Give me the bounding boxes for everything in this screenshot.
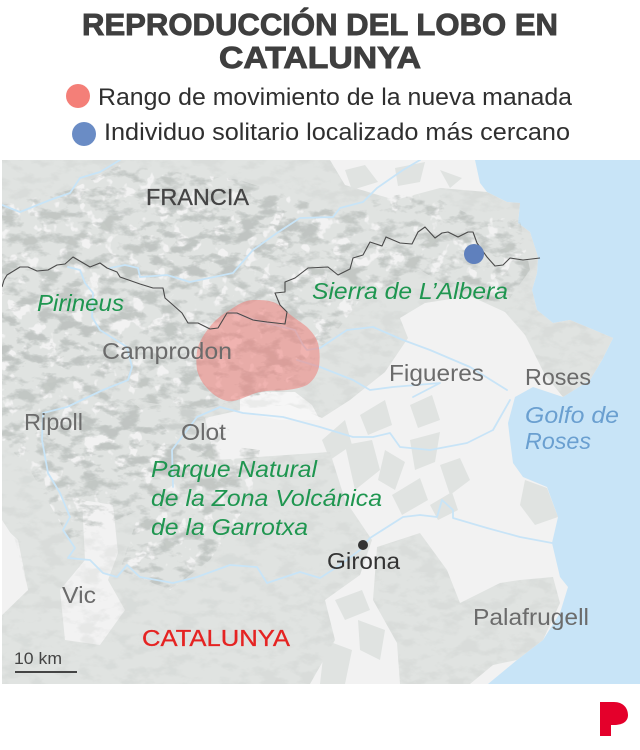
legend bbox=[66, 84, 573, 146]
label: Golfo de Roses bbox=[526, 406, 618, 449]
massif: Palafrugell bbox=[373, 533, 560, 684]
massif: Montgrí bbox=[520, 480, 558, 525]
label: Parque Natural: de la Garrotxa bbox=[151, 514, 308, 540]
logo bbox=[600, 702, 628, 736]
forest fragments bbox=[320, 162, 470, 684]
plain: western edge bbox=[11, 534, 28, 587]
label: Pirineus: Pirineus bbox=[37, 290, 125, 316]
legend item: lone individual: Individuo solitario localizado más cercano bbox=[104, 119, 570, 146]
faint relief everywhere bbox=[16, 392, 318, 644]
terrain bbox=[2, 160, 640, 684]
title bbox=[82, 6, 558, 75]
relief shading bbox=[2, 166, 530, 588]
legend item: new pack range: Rango de movimiento de la nueva manada bbox=[98, 84, 573, 111]
title: REPRODUCCIÓN DEL LOBO EN bbox=[82, 6, 558, 42]
title: CATALUNYA bbox=[219, 40, 421, 75]
plain: Vic bbox=[60, 500, 125, 645]
label: Parque Natural bbox=[152, 460, 382, 535]
scale bar: 10 km bbox=[14, 649, 62, 668]
label: Girona bbox=[328, 540, 400, 569]
light fragments bbox=[2, 165, 526, 590]
label: Figueres: Figueres bbox=[389, 360, 484, 386]
label: Golfo de Roses: Golfo de bbox=[525, 402, 619, 428]
label: Parque Natural: de la Zona Volcánica bbox=[151, 485, 382, 511]
label: Parque Natural: Parque Natural bbox=[151, 456, 318, 482]
rivers bbox=[2, 160, 552, 583]
label: Camprodon: Camprodon bbox=[102, 338, 232, 364]
scale bar bbox=[15, 652, 77, 673]
lone individual marker bbox=[464, 244, 484, 264]
land bbox=[2, 160, 613, 684]
label: Ripoll: Ripoll bbox=[24, 409, 83, 435]
label: Catalunya: CATALUNYA bbox=[142, 625, 291, 651]
plain: Olot bbox=[240, 392, 318, 416]
label: Francia: FRANCIA bbox=[146, 184, 250, 210]
border bbox=[2, 227, 540, 329]
label: Vic: Vic bbox=[62, 582, 96, 608]
label: Olot: Olot bbox=[181, 419, 227, 445]
strongest relief bbox=[2, 224, 318, 470]
label: Girona: Girona bbox=[327, 548, 400, 574]
pack range bbox=[196, 300, 320, 401]
sea bbox=[475, 160, 640, 684]
label: Golfo de Roses: Roses bbox=[525, 428, 591, 454]
label: Roses: Roses bbox=[525, 364, 591, 390]
label: Palafrugell: Palafrugell bbox=[473, 604, 589, 630]
label: Sierra de L'Albera: Sierra de L’Albera bbox=[312, 278, 508, 304]
map bbox=[2, 160, 640, 684]
